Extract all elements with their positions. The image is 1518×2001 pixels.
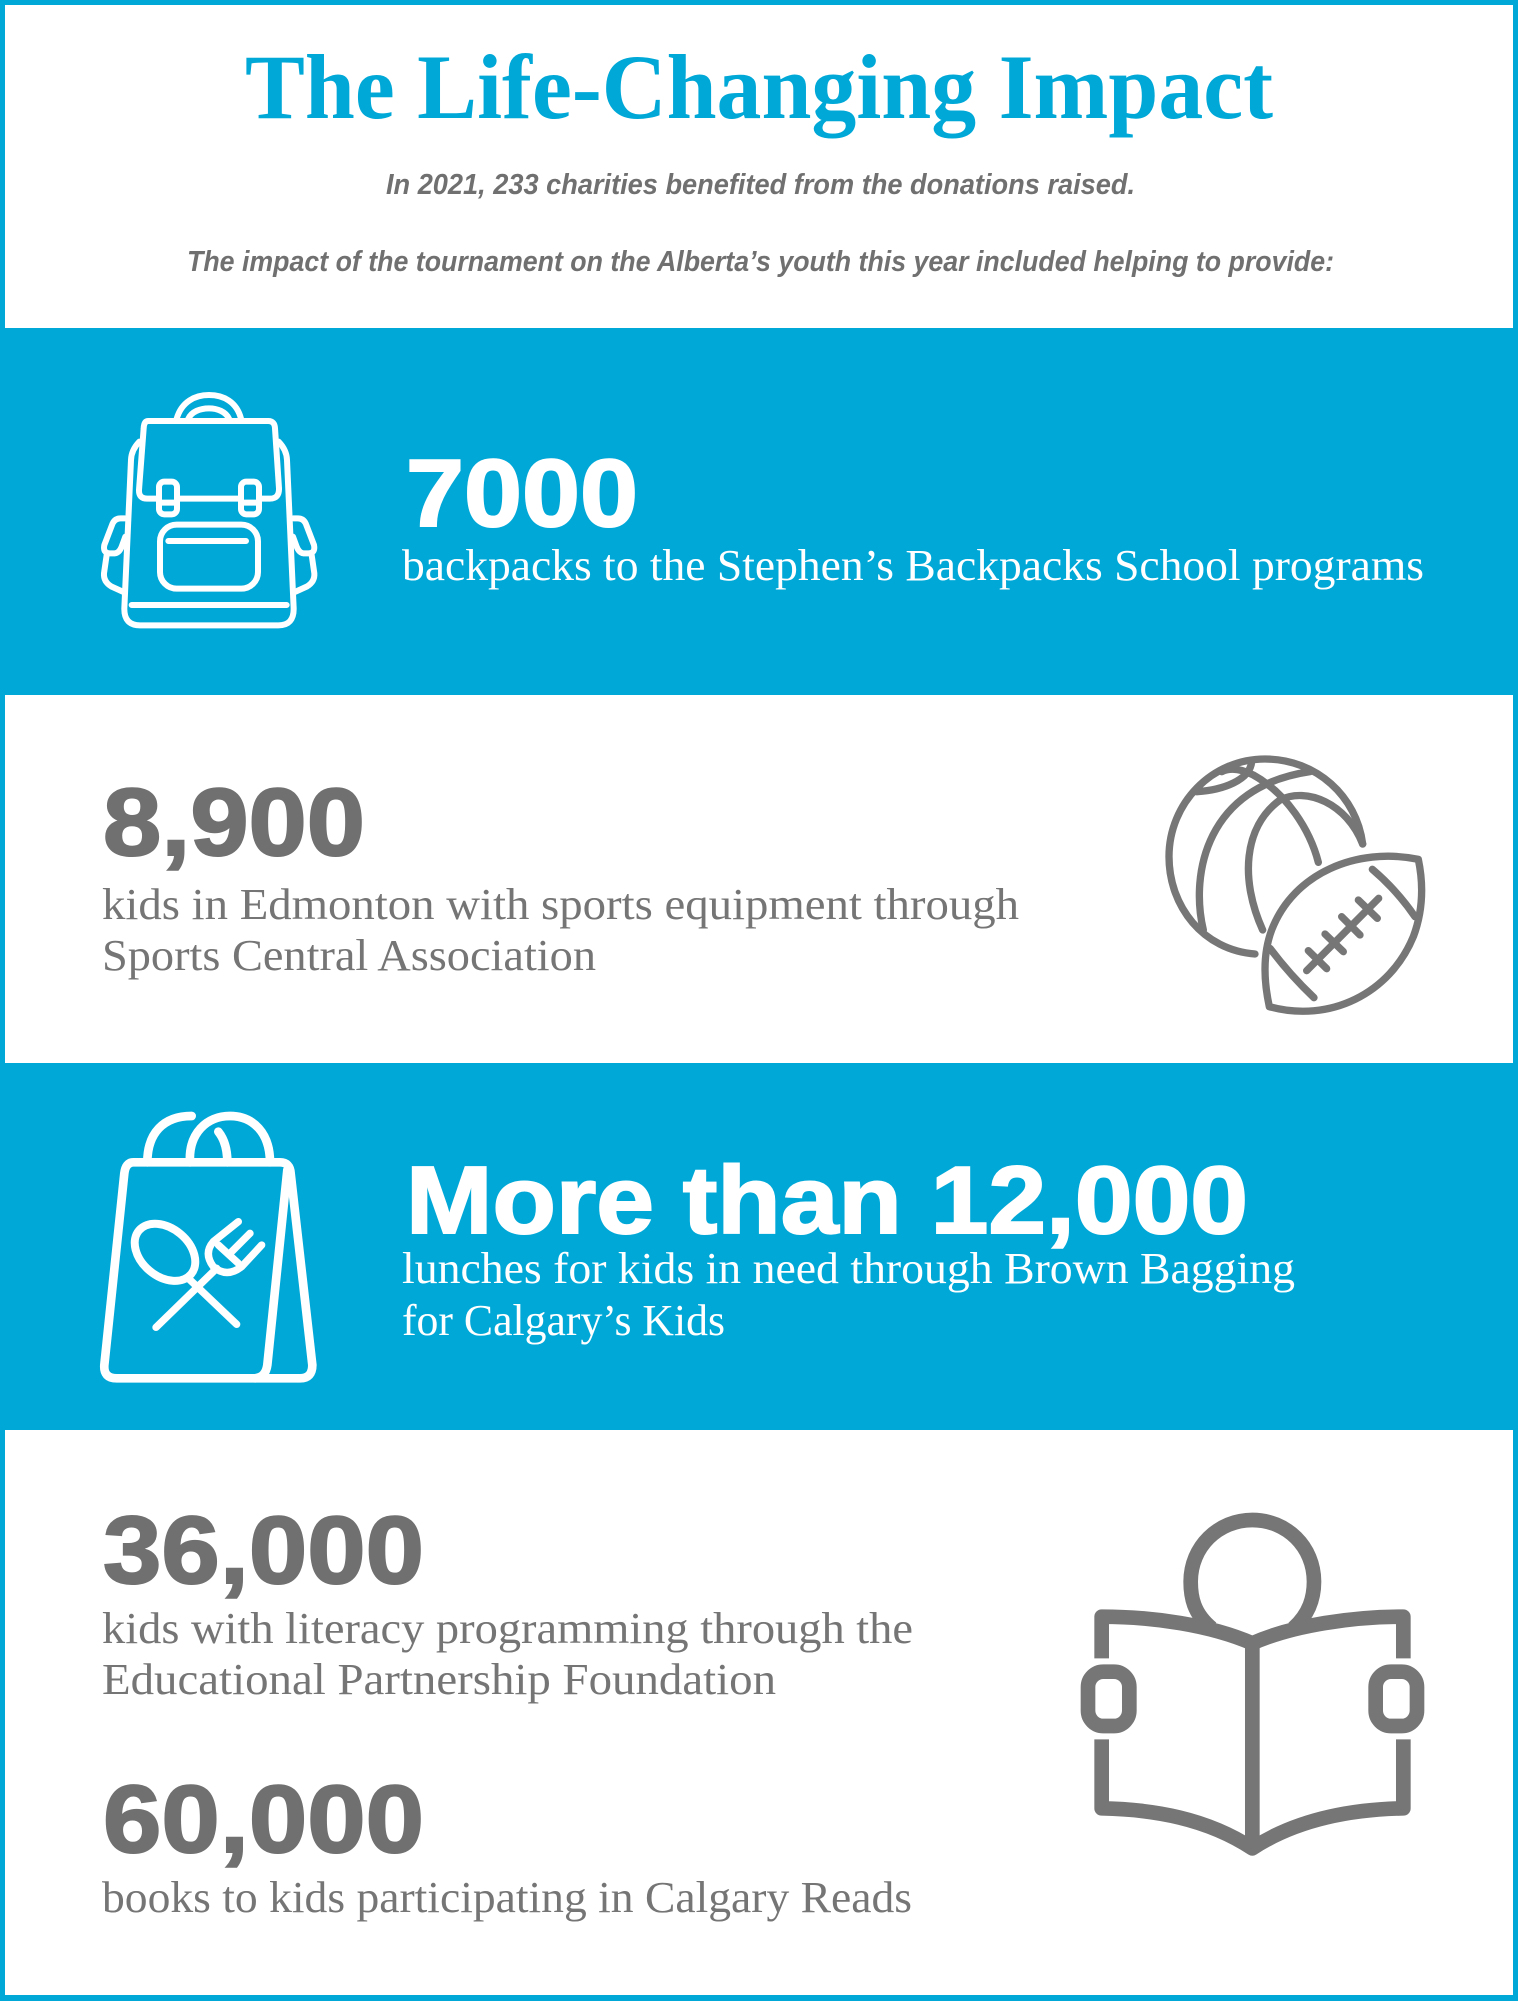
panel: literacy and books xyxy=(102,1497,1417,1922)
icon: backpack xyxy=(104,395,314,625)
panel: backpacks xyxy=(0,328,1518,695)
description: lunches: for Calgary’s Kids xyxy=(402,1296,725,1345)
description: sports equipment xyxy=(102,880,1019,980)
description: lunches xyxy=(402,1244,1295,1345)
stat: 7000: 7000 xyxy=(406,440,638,547)
stat: 60,000: 60,000 xyxy=(103,1766,424,1873)
panel: sports equipment xyxy=(102,759,1422,1011)
header panel xyxy=(187,36,1334,278)
description: books: books to kids participating in Calgary Reads xyxy=(102,1873,912,1922)
title: The Life-Changing Impact xyxy=(245,36,1273,138)
subtitle line 1: In 2021, 233 charities benefited from the donations raised. xyxy=(386,169,1135,201)
subtitle line 2: The impact of the tournament on the Alberta’s youth this year included helping to provide: xyxy=(187,246,1334,278)
panel: lunches xyxy=(0,1063,1518,1430)
description: backpacks: backpacks to the Stephen’s Backpacks School programs xyxy=(402,541,1424,590)
stat: 36,000: 36,000 xyxy=(103,1497,424,1604)
icon: basketball and football xyxy=(1169,759,1422,1011)
icon: lunch bag xyxy=(104,1116,312,1378)
stat: more than 12,000: More than 12,000 xyxy=(406,1147,1248,1254)
description: sports equipment: kids in Edmonton with sports equipment through xyxy=(102,880,1019,929)
description: lunches: lunches for kids in need through Brown Bagging xyxy=(402,1244,1295,1293)
description: literacy xyxy=(102,1604,913,1704)
icon: child reading book xyxy=(1088,1520,1417,1848)
stat: 8,900: 8,900 xyxy=(103,769,365,876)
description: literacy: Educational Partnership Foundation xyxy=(102,1655,776,1704)
description: literacy: kids with literacy programming through the xyxy=(102,1604,913,1653)
description: sports equipment: Sports Central Association xyxy=(102,931,596,980)
